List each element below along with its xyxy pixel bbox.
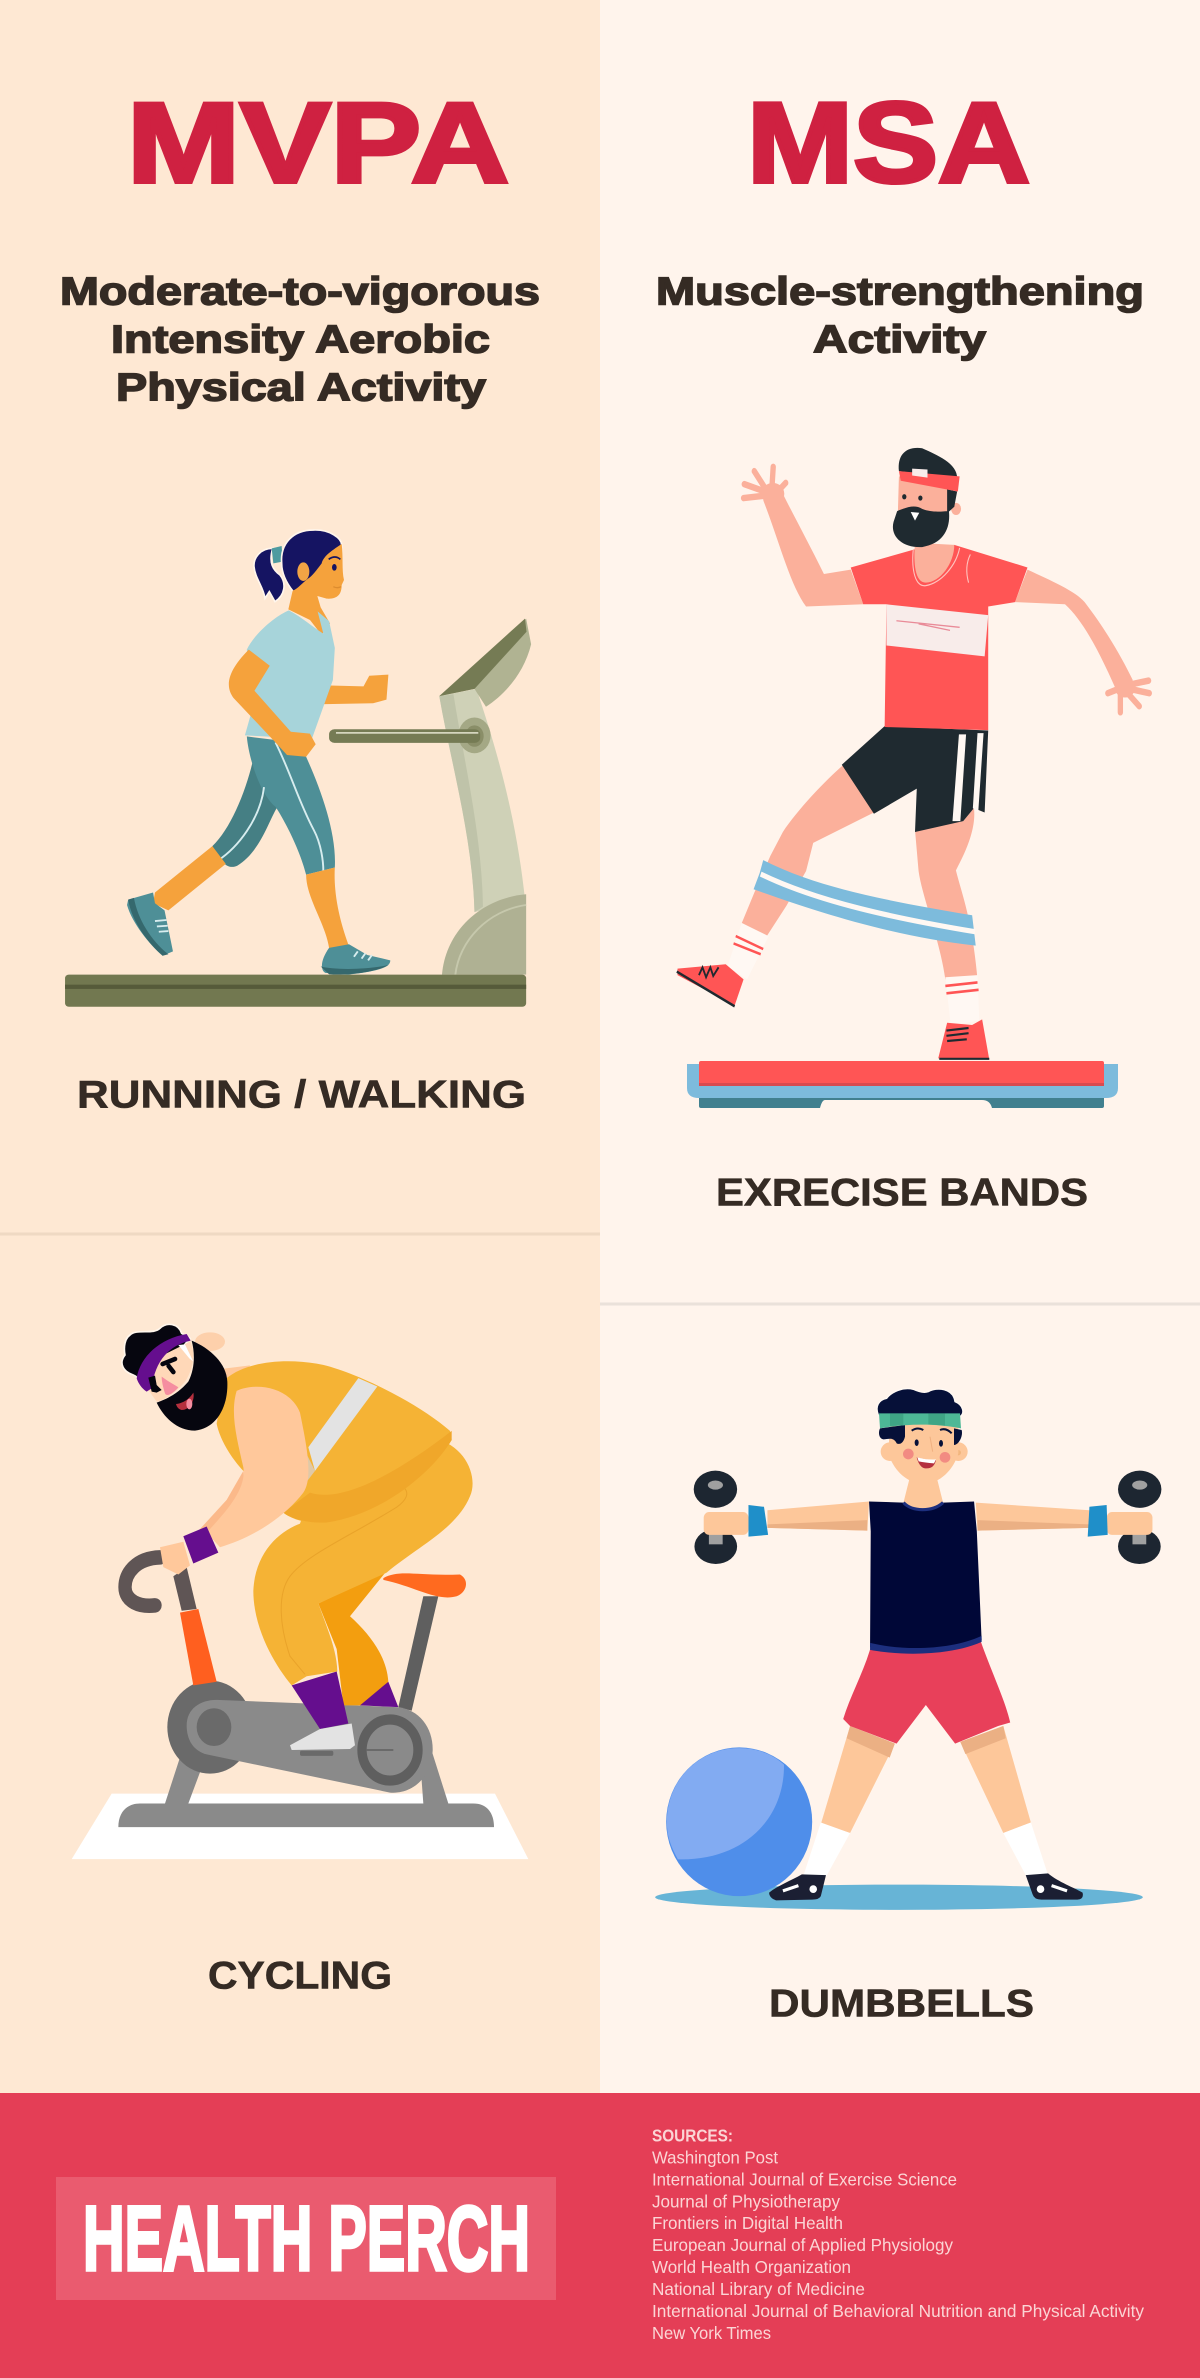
legs: [727, 765, 979, 1025]
illustration: man with exercise band: [677, 448, 1149, 1060]
text block: sources: Journal of Physiotherapy: [652, 2192, 840, 2212]
label: dumbbells: DUMBBELLS: [769, 1982, 1034, 2026]
text block: sources: [652, 2126, 1144, 2343]
resistance band: [754, 860, 976, 946]
illustration: man with dumbbells and exercise ball: [655, 1471, 1161, 1910]
title: MVPA: MVPA: [127, 80, 509, 207]
text block: sources: International Journal of Behavioral Nutrition and Physical Activity: [652, 2301, 1144, 2321]
dumbbell: right: [1088, 1471, 1161, 1564]
tank top: [869, 1502, 982, 1654]
head: [893, 448, 961, 547]
shirt: [851, 543, 1027, 730]
text block: sources: Washington Post: [652, 2148, 778, 2168]
text block: sources: International Journal of Exercise Science: [652, 2170, 957, 2190]
cyclist: [160, 1361, 473, 1750]
treadmill: [65, 619, 531, 1007]
illustration: step platform: [687, 1061, 1118, 1108]
label: cycling: CYCLING: [208, 1954, 392, 1998]
illustration: woman running on treadmill: [65, 610, 531, 1007]
text block: sources: Frontiers in Digital Health: [652, 2213, 843, 2233]
floor shadow: [655, 1885, 1143, 1910]
text block: sources: World Health Organization: [652, 2257, 851, 2277]
dumbbell: left: [694, 1471, 768, 1564]
neck and arms: [767, 1475, 1089, 1531]
panel: MVPA background: [0, 0, 600, 2093]
heading: MVPA definition: Physical Activity: [116, 366, 486, 410]
heading: MSA definition: [656, 270, 1144, 362]
illustration: dumbbell man head: [877, 1389, 968, 1484]
text block: sources: New York Times: [652, 2323, 771, 2343]
illustration: man cycling: [72, 1361, 528, 1859]
exercise bike: [72, 1557, 528, 1859]
illustration: cyclist head: [122, 1324, 227, 1431]
arms: [744, 467, 1149, 712]
runner: [127, 610, 390, 975]
heading: MVPA definition: [60, 270, 540, 410]
logo: Health Perch: HEALTH PERCH: [83, 2188, 530, 2290]
label: running / walking: RUNNING / WALKING: [77, 1074, 526, 1116]
logo: Health Perch: [56, 2177, 556, 2300]
shorts: [843, 1642, 1010, 1744]
legs: [769, 1726, 1083, 1900]
heading: MSA definition: Activity: [813, 318, 986, 362]
heading: MSA definition: Muscle-strengthening: [656, 270, 1144, 314]
label: exercise bands: EXRECISE BANDS: [716, 1172, 1088, 1214]
text block: sources: SOURCES:: [652, 2126, 733, 2146]
shoes: [677, 964, 989, 1060]
title: MSA: MSA: [747, 80, 1030, 207]
illustration: runner head: [254, 530, 344, 635]
shorts: [842, 726, 988, 832]
heading: MVPA definition: Intensity Aerobic: [111, 318, 490, 362]
panel: MSA background: [600, 0, 1200, 2093]
footer: [0, 2093, 1200, 2378]
text block: sources: European Journal of Applied Physiology: [652, 2235, 953, 2255]
exercise ball: [666, 1747, 812, 1896]
heading: MVPA definition: Moderate-to-vigorous: [60, 270, 540, 314]
text block: sources: National Library of Medicine: [652, 2279, 865, 2299]
